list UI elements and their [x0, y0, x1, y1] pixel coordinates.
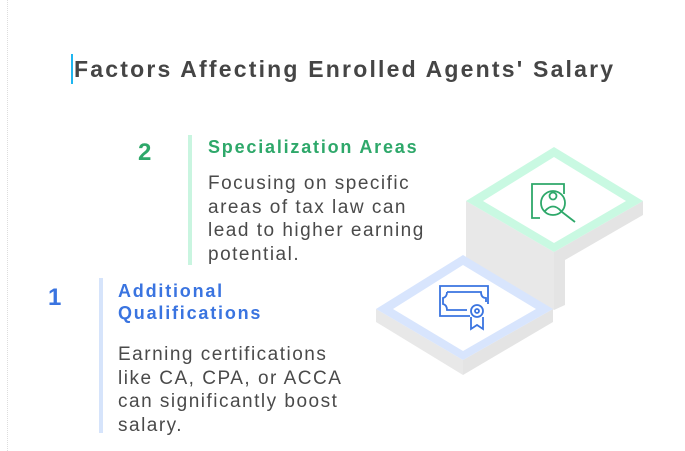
- heading: specialization: Specialization Areas: [208, 137, 418, 157]
- text: specialization: [208, 173, 425, 264]
- text: specialization: lead to higher earning: [208, 220, 425, 241]
- step 2: [466, 147, 643, 310]
- text: qualifications: salary.: [118, 414, 183, 436]
- text: qualifications: like CA, CPA, or ACCA: [118, 368, 342, 388]
- text: qualifications: [118, 344, 342, 436]
- number 1: 1: [48, 284, 61, 311]
- text: specialization: potential.: [208, 244, 300, 264]
- panel: specialization areas: [188, 135, 425, 265]
- text: qualifications: Earning certifications: [118, 344, 327, 365]
- title: Factors Affecting Enrolled Agents' Salary: [74, 56, 615, 82]
- icon: certificate: [440, 286, 488, 329]
- left dotted border: [7, 0, 8, 451]
- heading: qualifications: [118, 281, 262, 323]
- panel: additional qualifications: [99, 278, 342, 436]
- text: specialization: Focusing on specific: [208, 173, 410, 194]
- step 1: [376, 255, 553, 375]
- text: specialization: areas of tax law can: [208, 196, 407, 218]
- heading: qualifications: Qualifications: [118, 303, 262, 323]
- number 2: 2: [138, 139, 151, 166]
- heading: qualifications: Additional: [118, 281, 224, 301]
- text: qualifications: can significantly boost: [118, 391, 338, 412]
- icon: profile search: [532, 184, 575, 222]
